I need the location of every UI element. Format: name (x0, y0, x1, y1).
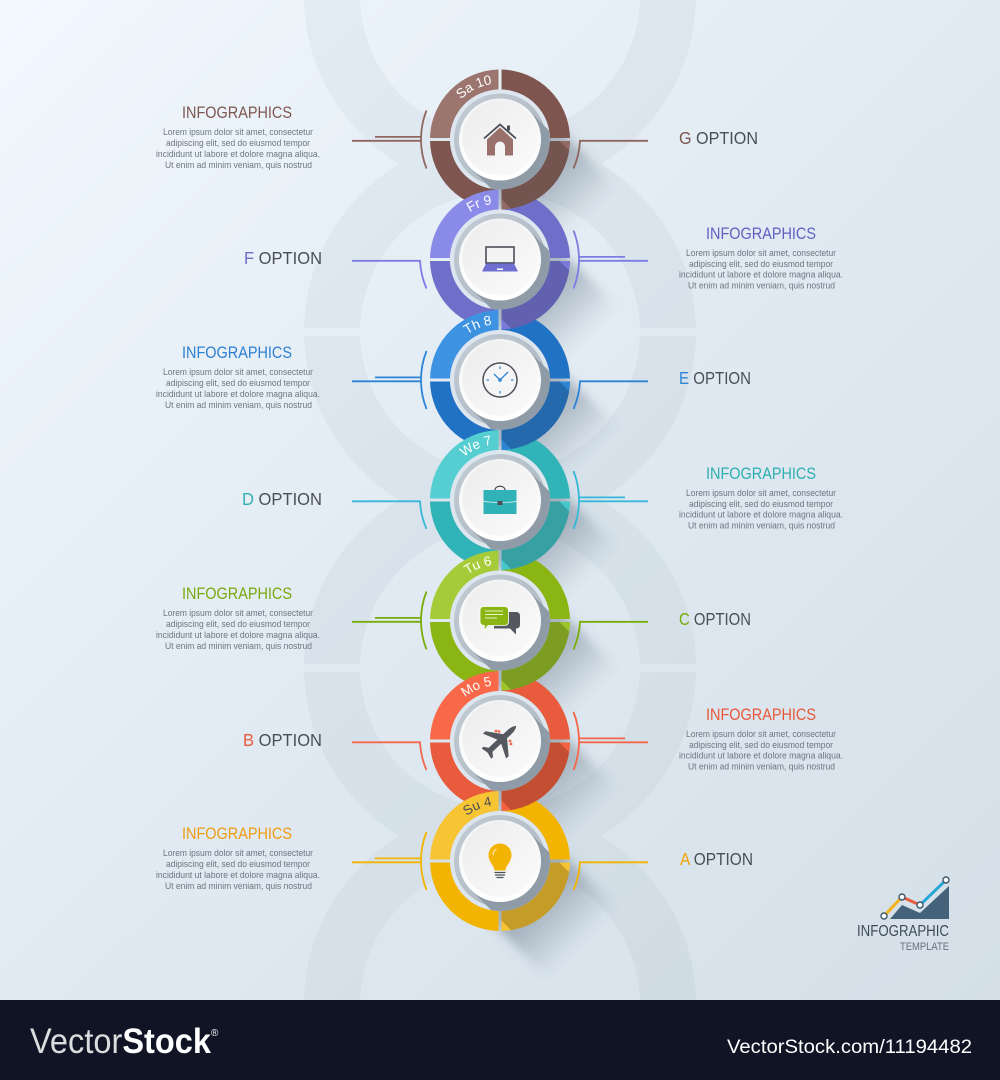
text block: A infographics: INFOGRAPHICS (182, 825, 292, 843)
label: G OPTION: G OPTION (679, 128, 758, 148)
label: D OPTION: D OPTION (242, 489, 322, 509)
node F: purple, Fr 9, laptop: Fr 9 (466, 195, 491, 212)
text block: C infographics: INFOGRAPHICS (182, 585, 292, 603)
text block: D infographics: adipiscing elit, sed do eiusmod tempor (689, 498, 833, 509)
text block: E infographics: adipiscing elit, sed do eiusmod tempor (166, 377, 310, 388)
logo: infographic template: TEMPLATE (900, 941, 949, 953)
logo: infographic template: INFOGRAPHIC (857, 923, 949, 940)
text block: A infographics: Ut enim ad minim veniam, quis nostrud (165, 880, 312, 891)
text block: G infographics: adipiscing elit, sed do eiusmod tempor (166, 137, 310, 148)
icon: light bulb (488, 844, 512, 878)
label: F OPTION: F OPTION (244, 248, 322, 268)
footer bar (0, 1000, 1000, 1080)
icon: briefcase (484, 486, 516, 514)
node E: blue, Th 8, clock (352, 262, 648, 468)
text block: D infographics: INFOGRAPHICS (706, 465, 816, 483)
footer registered mark: ® (211, 1028, 219, 1039)
text block: E infographics: Lorem ipsum dolor sit amet, consectetur (163, 366, 313, 377)
text block: E infographics (156, 344, 320, 410)
icon: clock (483, 363, 517, 397)
text block: A infographics: Lorem ipsum dolor sit amet, consectetur (163, 847, 313, 858)
text block: A infographics (156, 825, 320, 891)
node G: brown, Sa 10, home: Sa 10 (456, 75, 491, 98)
label: A OPTION: A OPTION (680, 849, 753, 869)
node C: green, Tu 6, chat (352, 502, 648, 710)
node A: yellow, Su 4, light bulb (352, 742, 648, 968)
text block: G infographics: Ut enim ad minim veniam, quis nostrud (165, 159, 312, 170)
text block: G infographics: incididunt ut labore et dolore magna aliqua. (156, 148, 320, 159)
node B: red, Mo 5, plane: Mo 5 (460, 676, 491, 696)
text block: G infographics (156, 104, 320, 170)
node F: purple, Fr 9, laptop (352, 142, 648, 348)
icon: laptop (482, 247, 518, 272)
text block: E infographics: Ut enim ad minim veniam, quis nostrud (165, 399, 312, 410)
text block: G infographics: INFOGRAPHICS (182, 104, 292, 122)
text block: B infographics (679, 706, 843, 772)
text block: B infographics: incididunt ut labore et dolore magna aliqua. (679, 750, 843, 760)
node D: teal, We 7, briefcase (352, 382, 648, 589)
text block: B infographics: Ut enim ad minim veniam, quis nostrud (688, 760, 835, 772)
text block: F infographics: Ut enim ad minim veniam, quis nostrud (688, 280, 835, 290)
footer url: VectorStock.com/11194482 (727, 1036, 972, 1058)
node A: yellow, Su 4, light bulb: Su 4 (463, 796, 492, 814)
label: E OPTION: E OPTION (679, 368, 751, 388)
node B: red, Mo 5, plane (352, 622, 648, 830)
icon: airplane (475, 714, 528, 766)
footer brand: VectorStock (30, 1022, 211, 1061)
text block: A infographics: incididunt ut labore et dolore magna aliqua. (156, 869, 320, 880)
text block: B infographics: INFOGRAPHICS (706, 706, 816, 724)
text block: F infographics: INFOGRAPHICS (706, 225, 816, 243)
text block: C infographics (156, 585, 320, 651)
label: B OPTION: B OPTION (243, 730, 322, 750)
text block: C infographics: adipiscing elit, sed do eiusmod tempor (166, 618, 310, 629)
text block: F infographics: adipiscing elit, sed do eiusmod tempor (689, 258, 833, 269)
node D: teal, We 7, briefcase: We 7 (458, 436, 490, 456)
logo: infographic template (857, 877, 949, 953)
text block: F infographics: Lorem ipsum dolor sit amet, consectetur (686, 247, 836, 258)
text block: E infographics: INFOGRAPHICS (182, 344, 292, 362)
icon: home (484, 124, 516, 156)
text block: B infographics: Lorem ipsum dolor sit amet, consectetur (686, 728, 836, 739)
text block: B infographics: adipiscing elit, sed do eiusmod tempor (689, 739, 833, 750)
background interlocking rings (304, 0, 696, 998)
text block: A infographics: adipiscing elit, sed do eiusmod tempor (166, 858, 310, 869)
node C: green, Tu 6, chat: Tu 6 (463, 556, 491, 573)
text block: D infographics: Lorem ipsum dolor sit amet, consectetur (686, 487, 836, 498)
text block: D infographics (679, 465, 843, 530)
icon: chat bubbles (480, 606, 520, 634)
node E: blue, Th 8, clock: Th 8 (462, 316, 491, 333)
text block: E infographics: incididunt ut labore et dolore magna aliqua. (156, 388, 320, 399)
text block: D infographics: Ut enim ad minim veniam, quis nostrud (688, 520, 835, 530)
text block: C infographics: Lorem ipsum dolor sit amet, consectetur (163, 607, 313, 618)
text block: F infographics: incididunt ut labore et dolore magna aliqua. (679, 268, 843, 280)
text block: F infographics (679, 225, 843, 290)
text block: C infographics: incididunt ut labore et dolore magna aliqua. (156, 629, 320, 640)
label: C OPTION: C OPTION (679, 609, 751, 629)
text block: C infographics: Ut enim ad minim veniam, quis nostrud (165, 640, 312, 651)
text block: D infographics: incididunt ut labore et dolore magna aliqua. (679, 508, 843, 520)
text block: G infographics: Lorem ipsum dolor sit amet, consectetur (163, 126, 313, 137)
node G: brown, Sa 10, home (352, 70, 648, 228)
